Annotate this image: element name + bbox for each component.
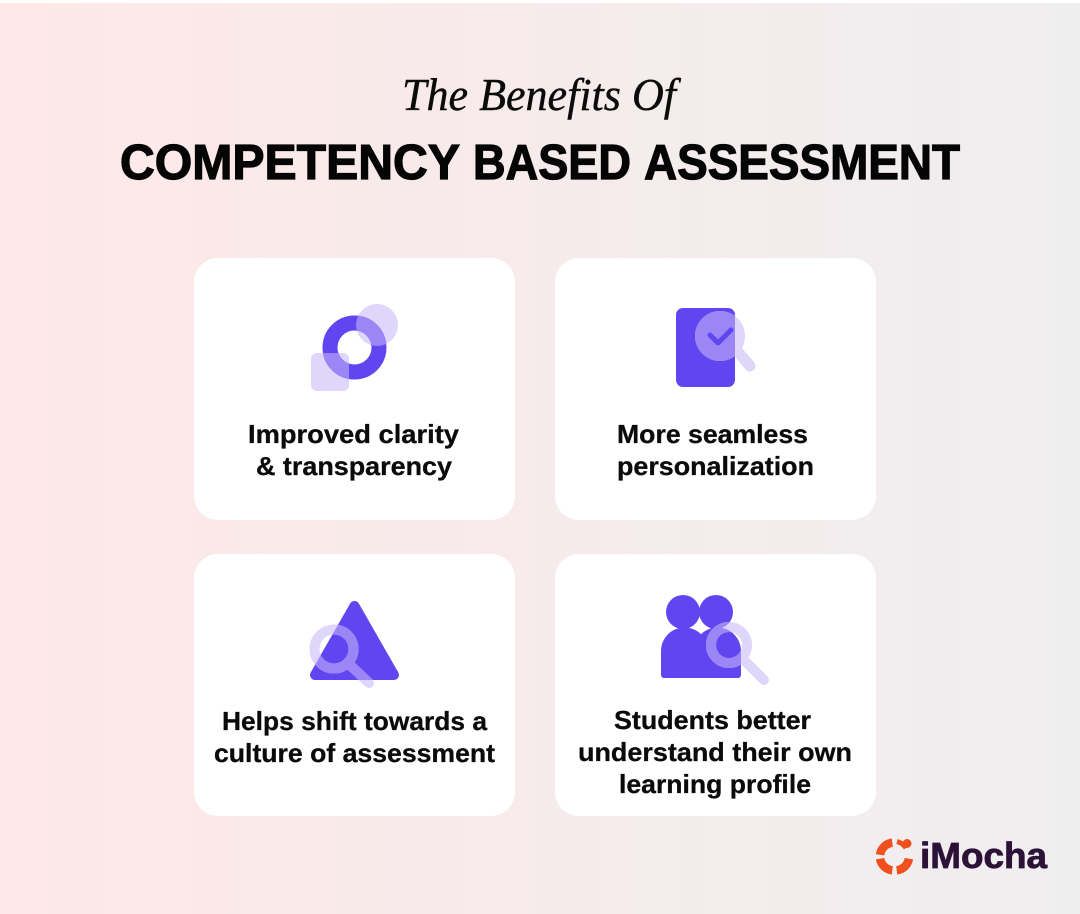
label: seamless personalization (617, 419, 814, 481)
label: seamless personalization: More seamless (617, 419, 808, 449)
label: improved clarity (248, 419, 460, 481)
icon: logo ring (880, 839, 912, 870)
label: learning profile (578, 705, 852, 799)
title: ASSESSMENT (644, 136, 960, 190)
wordmark: iMocha (920, 835, 1048, 876)
label: seamless personalization: personalization (617, 451, 814, 481)
icon: two people with magnifier (661, 595, 764, 680)
label: improved clarity: & transparency (256, 451, 453, 481)
label: improved clarity: Improved clarity (248, 419, 460, 449)
label: learning profile: learning profile (619, 769, 811, 799)
panel: culture of assessment (194, 554, 515, 816)
icon: ring with circle and square (311, 304, 398, 391)
panel: improved clarity (194, 258, 515, 520)
title (120, 136, 960, 190)
panel: seamless personalization (555, 258, 876, 520)
label: culture of assessment (214, 706, 495, 768)
logo: iMocha (880, 835, 1048, 876)
icon: document with magnifier (676, 308, 750, 387)
title: BASED (473, 136, 631, 190)
label: culture of assessment: culture of assessment (214, 738, 495, 768)
panel: learning profile (555, 554, 876, 816)
icon: triangle with magnifier (314, 606, 394, 683)
label: culture of assessment: Helps shift towards a (222, 706, 488, 736)
label: learning profile: understand their own (578, 737, 852, 767)
title: COMPETENCY (120, 136, 460, 190)
subtitle: The Benefits Of (402, 69, 682, 120)
label: learning profile: Students better (614, 705, 811, 735)
